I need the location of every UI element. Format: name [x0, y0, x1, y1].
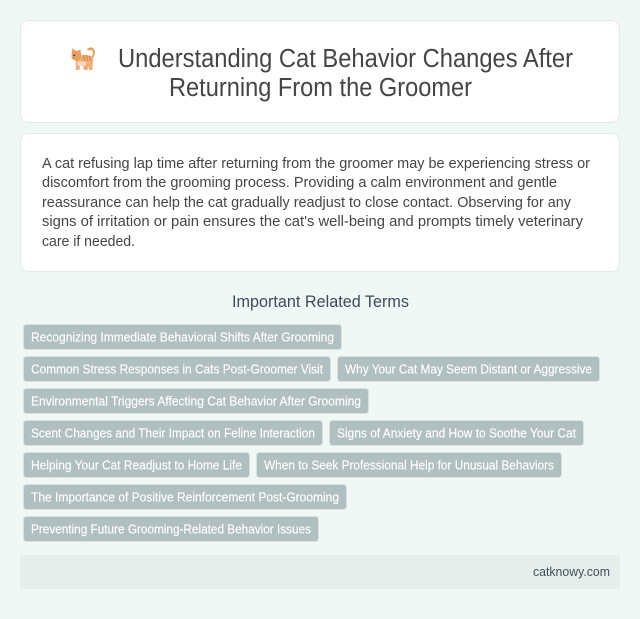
tag: Why Your Cat May Seem Distant or Aggressive	[345, 362, 592, 376]
title text: Returning From the Groomer	[169, 74, 472, 102]
tag	[256, 452, 562, 478]
title text: Understanding Cat Behavior Changes After	[118, 45, 573, 73]
description text: discomfort from the grooming process. Providing a calm environment and gentle	[42, 174, 557, 191]
tag	[24, 452, 250, 478]
description text: reassurance can help the cat gradually readjust to close contact. Observing for any	[42, 194, 571, 211]
description text: A cat refusing lap time after returning from the groomer may be experiencing stress or	[42, 155, 590, 172]
tag: Environmental Triggers Affecting Cat Behavior After Grooming	[31, 394, 361, 408]
description text: signs of irritation or pain ensures the cat's well-being and prompts timely veterinary	[42, 213, 583, 230]
tag	[24, 420, 322, 446]
tag: Recognizing Immediate Behavioral Shifts After Grooming	[31, 330, 334, 344]
footer text: catknowy.com	[533, 564, 610, 579]
footer	[20, 555, 620, 589]
tag: Helping Your Cat Readjust to Home Life	[31, 458, 242, 472]
tag	[24, 484, 346, 510]
tag: Common Stress Responses in Cats Post-Groomer Visit	[31, 362, 323, 376]
tag: When to Seek Professional Help for Unusual Behaviors	[264, 458, 554, 472]
tag	[24, 516, 318, 542]
title text	[118, 45, 573, 102]
tag: Signs of Anxiety and How to Soothe Your Cat	[337, 426, 576, 440]
tag: Scent Changes and Their Impact on Feline Interaction	[31, 426, 315, 440]
panel: description	[20, 134, 620, 272]
tag	[330, 420, 584, 446]
tag	[338, 356, 600, 382]
tag	[24, 356, 330, 382]
heading: related terms: Important Related Terms	[232, 293, 409, 311]
tag: Preventing Future Grooming-Related Behavior Issues	[31, 522, 311, 536]
panel: title	[20, 20, 620, 122]
tag: The Importance of Positive Reinforcement Post-Grooming	[31, 490, 339, 504]
icon: cat	[72, 47, 95, 70]
description text: care if needed.	[42, 233, 135, 250]
tags: related terms	[24, 324, 600, 542]
tag	[24, 388, 368, 414]
tag	[24, 324, 342, 350]
description text	[42, 155, 590, 250]
